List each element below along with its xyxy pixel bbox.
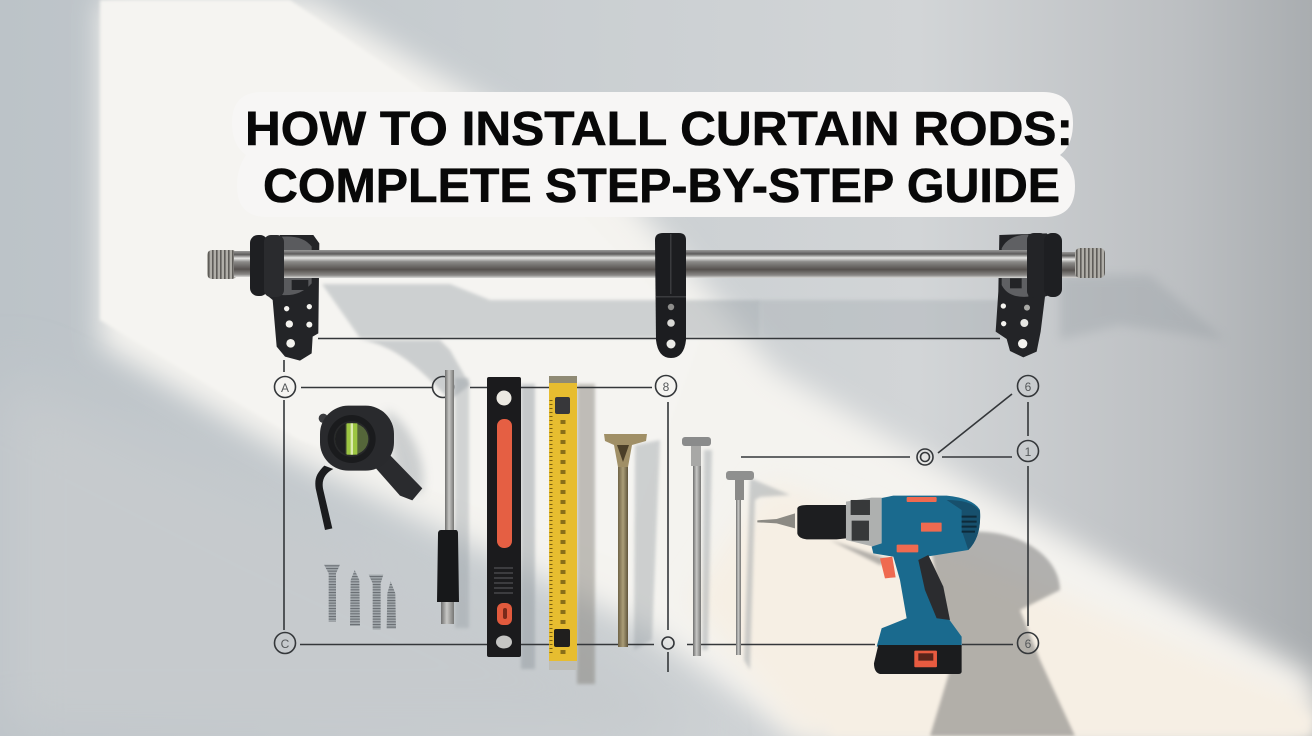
diagram markers: C <box>281 637 290 651</box>
right bracket plate <box>996 233 1060 357</box>
drill bit and chuck <box>757 505 846 539</box>
yellow measuring ruler <box>549 376 577 670</box>
title line 1: HOW TO INSTALL CURTAIN RODS: <box>245 103 1073 156</box>
diagram markers: 8 <box>663 380 670 394</box>
drill body <box>872 496 980 647</box>
diagram markers <box>274 376 1038 654</box>
diagram markers: 6 <box>1025 380 1032 394</box>
diagram markers: 6 <box>1025 637 1032 651</box>
threaded rod ends <box>207 248 1105 279</box>
spirit level <box>487 377 521 657</box>
rod tube <box>280 250 1028 278</box>
left bracket plate <box>267 235 319 361</box>
drill orange accents <box>880 497 942 578</box>
title background <box>232 92 1075 217</box>
cordless drill <box>757 496 980 674</box>
diagram markers: 1 <box>1025 445 1032 459</box>
shadows cast by rod and tools <box>322 275 1225 736</box>
title line 2: COMPLETE STEP-BY-STEP GUIDE <box>263 160 1060 213</box>
right bracket collar <box>1027 233 1062 298</box>
installation diagram lines <box>274 338 1038 672</box>
title banner <box>232 92 1075 217</box>
curtain rod <box>207 233 1105 361</box>
wall screws and anchors <box>324 565 396 629</box>
diagram markers: A <box>281 381 289 395</box>
drill battery <box>874 645 962 674</box>
tape measure <box>315 406 422 530</box>
bronze pin <box>604 434 647 647</box>
screwdriver <box>437 370 459 624</box>
left bracket collar <box>250 235 284 297</box>
drill collar <box>846 498 882 547</box>
center bracket <box>655 233 686 358</box>
long metal pins <box>682 437 754 656</box>
